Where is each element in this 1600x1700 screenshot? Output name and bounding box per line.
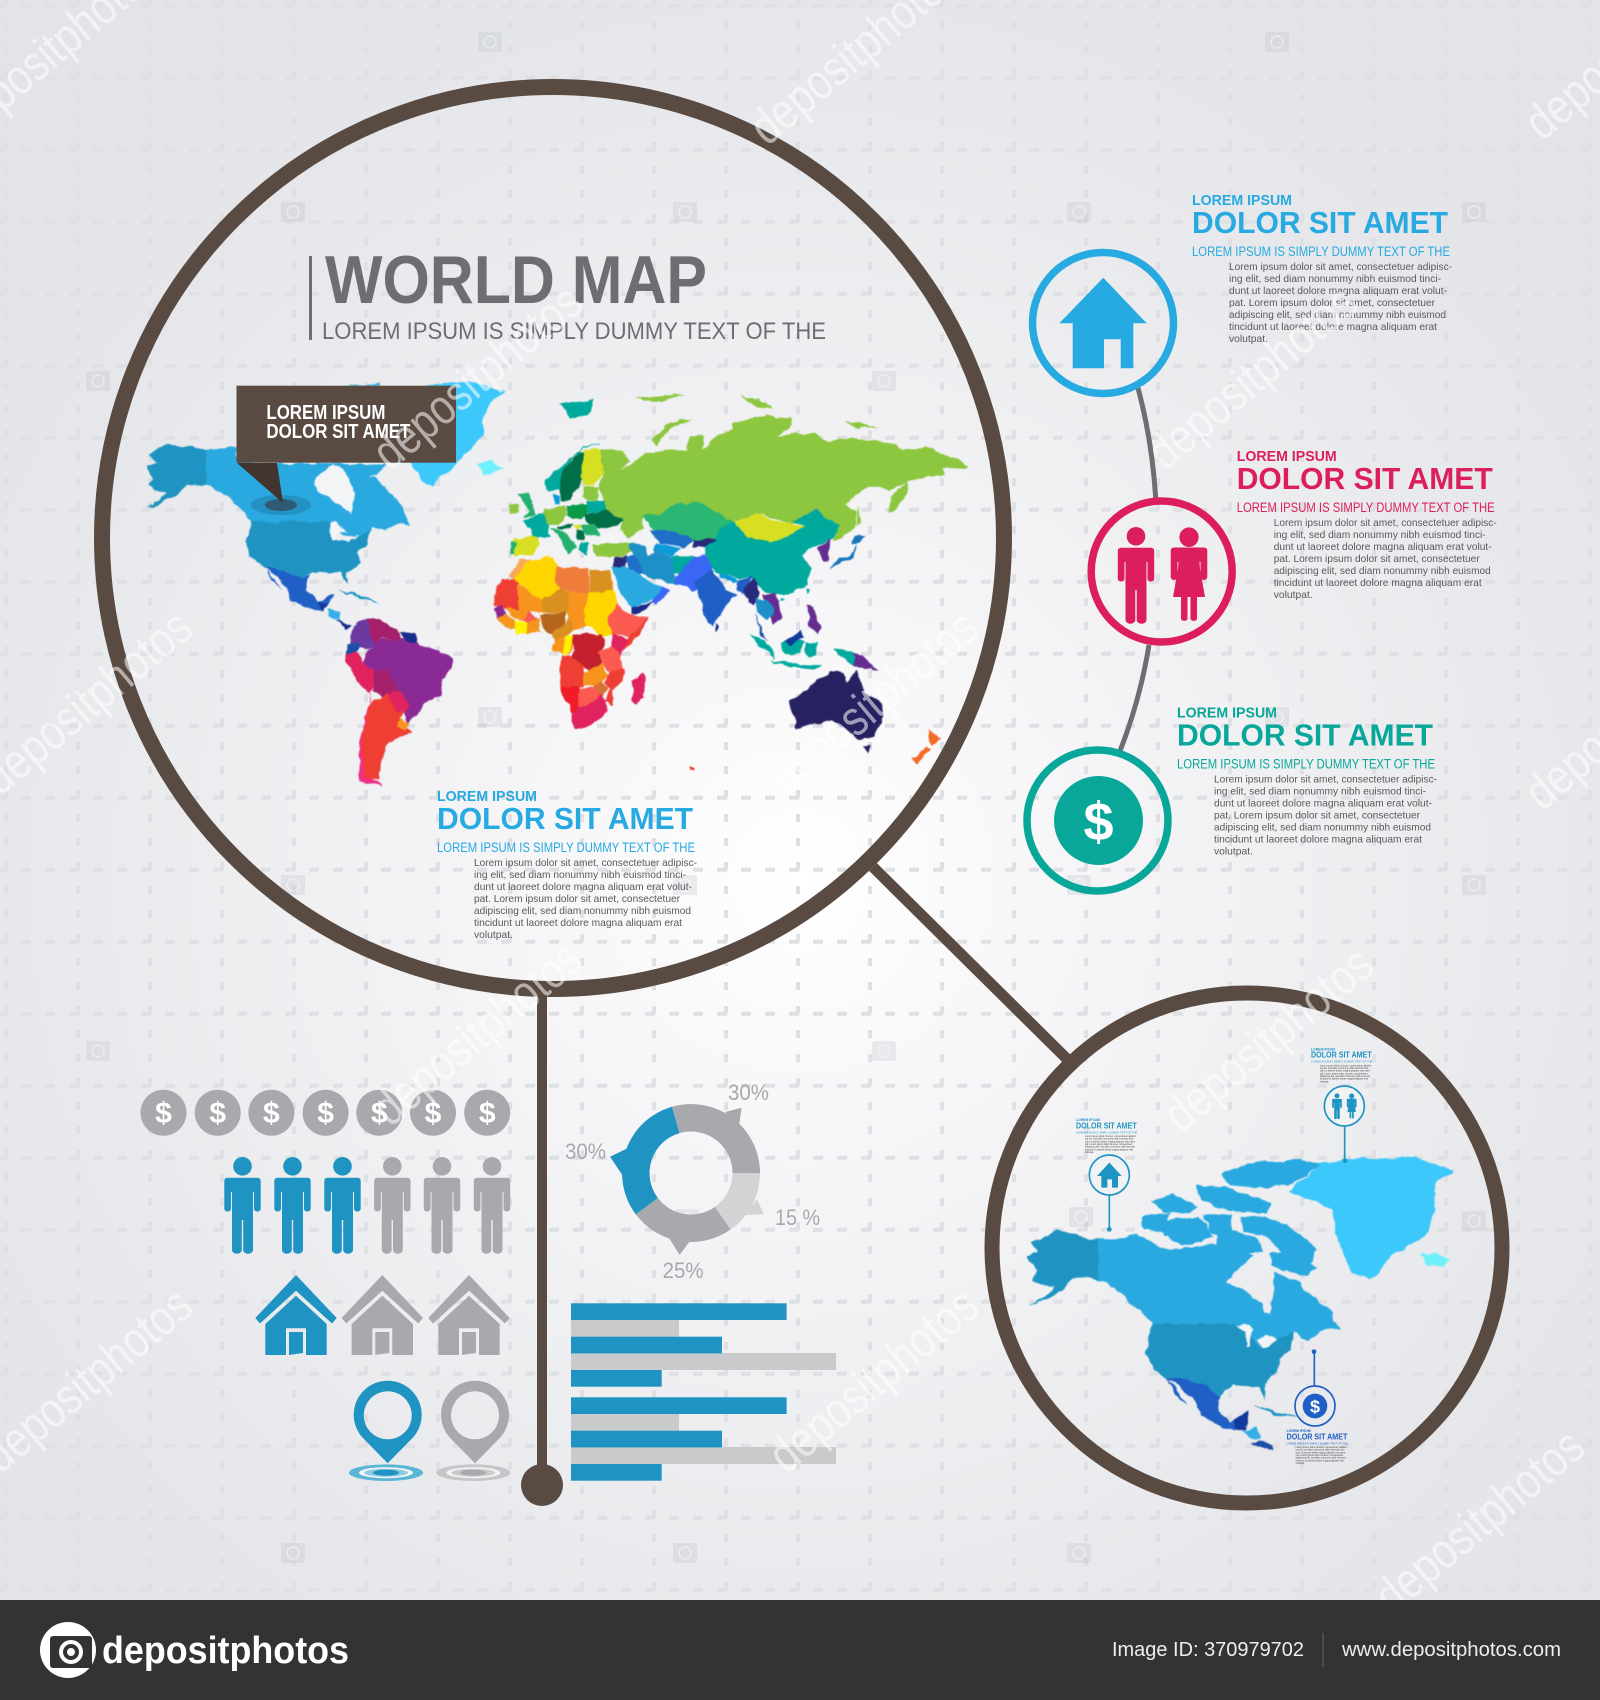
mini label: dollar: pat. Lorem ipsum dolor sit amet, consectetuer [1296,1454,1343,1457]
mini label: people: DOLOR SIT AMET [1311,1050,1372,1060]
pin: dollar [1295,1349,1335,1426]
watermark text: depositphotos [1136,274,1368,480]
panel: north america inset [992,993,1502,1503]
text block: pink: LOREM IPSUM [1237,448,1337,465]
mini label: people: tincidunt ut laoreet dolore magna aliquam erat [1320,1078,1368,1081]
text block: map caption [437,788,697,941]
inset map [1027,1157,1453,1450]
text block: teal: dunt ut laoreet dolore magna aliquam erat volut- [1214,798,1432,810]
mini label: dollar: ing elit, sed diam nonummy nibh euismod tinci- [1296,1449,1345,1452]
text block: blue: Lorem ipsum dolor sit amet, consectetuer adipisc- [1229,261,1452,273]
icon: dollar in teal circle [1027,750,1168,891]
mini label: people: LOREM IPSUM IS SIMPLY DUMMY TEXT OF THE [1311,1060,1372,1064]
text block: blue: dunt ut laoreet dolore magna aliquam erat volut- [1229,285,1447,297]
image id: Image ID: 370979702 [1112,1639,1304,1661]
inset circle ring [992,993,1502,1503]
big circle ring [102,87,1004,989]
text block: teal: DOLOR SIT AMET [1177,718,1433,752]
pictogram: houses [255,1275,510,1355]
mini label: house: DOLOR SIT AMET [1076,1120,1137,1130]
text block: map caption: DOLOR SIT AMET [437,801,693,836]
pin: people [1324,1086,1364,1163]
region: russia [558,396,968,540]
text block: teal [1177,704,1437,858]
mini label: dollar: dunt ut laoreet dolore magna aliquam erat volut- [1296,1451,1346,1454]
text block: pink: LOREM IPSUM IS SIMPLY DUMMY TEXT OF THE [1237,500,1495,515]
region: oceania [689,670,942,771]
mini label: house: LOREM IPSUM IS SIMPLY DUMMY TEXT OF THE [1076,1130,1137,1134]
donut labels [565,1080,820,1283]
mini label: house: pat. Lorem ipsum dolor sit amet, consectetuer [1085,1143,1133,1146]
callout: LOREM IPSUM [266,402,385,424]
subtitle: LOREM IPSUM IS SIMPLY DUMMY TEXT OF THE [322,318,826,345]
title: WORLD MAP [325,242,707,318]
text block: map caption: Lorem ipsum dolor sit amet, consectetuer adipisc- [474,857,697,869]
bar chart [571,1303,836,1481]
mini label: people: volutpat. [1320,1080,1329,1083]
pictogram: dollar coins: $ [263,1097,280,1130]
text block: pink: dunt ut laoreet dolore magna aliquam erat volut- [1274,541,1492,553]
mini label: dollar: tincidunt ut laoreet dolore magna aliquam erat [1296,1459,1344,1462]
mini label: people: dunt ut laoreet dolore magna aliquam erat volut- [1320,1070,1370,1073]
donut labels: 30% [565,1139,606,1164]
title tick [309,256,312,340]
watermark text: depositphotos [361,930,593,1136]
footer bar [0,1600,1600,1700]
text block: map caption: adipiscing elit, sed diam nonummy nibh euismod [474,905,691,917]
callout [236,386,456,515]
text block: pink: Lorem ipsum dolor sit amet, consectetuer adipisc- [1274,517,1497,529]
text block: blue: adipiscing elit, sed diam nonummy nibh euismod [1229,309,1446,321]
mini label: people: adipiscing elit, sed diam nonummy nibh euismod [1320,1075,1371,1078]
pictogram: dollar coins: $ [209,1097,226,1130]
pictogram: people [224,1157,510,1254]
inset pins and labels [1076,1047,1372,1465]
mini label: house: ing elit, sed diam nonummy nibh euismod tinci- [1085,1138,1134,1141]
pictogram: dollar coins [140,1090,510,1136]
mini label: house: dunt ut laoreet dolore magna aliquam erat volut- [1085,1140,1135,1143]
pin: house [1089,1155,1129,1232]
map: africa, europe, asia and oceania [494,396,968,771]
text block: blue [1192,192,1452,345]
donut labels: 25% [663,1258,704,1283]
text block: teal: volutpat. [1214,846,1253,858]
text block: blue: volutpat. [1229,333,1268,345]
pictogram: dollar coins: $ [155,1097,172,1130]
pin: dollar: $ [1310,1397,1320,1417]
logo wordmark: depositphotos [102,1630,349,1672]
mini label: dollar: adipiscing elit, sed diam nonummy nibh euismod [1296,1457,1346,1460]
connector line to small circle [873,867,1068,1060]
mini label: people [1311,1047,1372,1083]
text block: teal: tincidunt ut laoreet dolore magna aliquam erat [1214,834,1422,846]
pictogram: dollar coins: $ [371,1097,388,1130]
text block: blue: ing elit, sed diam nonummy nibh euismod tinci- [1229,273,1441,285]
region: asia [612,502,877,670]
text block: teal: ing elit, sed diam nonummy nibh euismod tinci- [1214,786,1426,798]
text block: blue: tincidunt ut laoreet dolore magna aliquam erat [1229,321,1437,333]
text block: blue: LOREM IPSUM IS SIMPLY DUMMY TEXT OF THE [1192,244,1450,259]
mini label: house: Lorem ipsum dolor sit amet, consectetuer adipisc- [1085,1135,1137,1138]
pictogram: dollar coins: $ [317,1097,334,1130]
mini label: house: LOREM IPSUM [1076,1118,1100,1122]
donut chart [565,1080,820,1283]
text block: teal: adipiscing elit, sed diam nonummy nibh euismod [1214,822,1431,834]
mini label: dollar: Lorem ipsum dolor sit amet, consectetuer adipisc- [1296,1446,1347,1449]
curved connectors between topic icons [1120,388,1156,751]
world map [146,382,968,787]
text block: teal: LOREM IPSUM IS SIMPLY DUMMY TEXT OF THE [1177,756,1435,772]
text block: blue: DOLOR SIT AMET [1192,205,1448,240]
watermark text: depositphotos [1152,936,1384,1142]
text block: teal: pat. Lorem ipsum dolor sit amet, consectetuer [1214,810,1420,822]
callout: DOLOR SIT AMET [266,421,410,443]
mini label: dollar: LOREM IPSUM [1287,1429,1311,1433]
vertical stem with ball [521,990,563,1506]
mini label: dollar: volutpat. [1296,1462,1305,1465]
region: europe [509,443,633,557]
text block: teal: Lorem ipsum dolor sit amet, consectetuer adipisc- [1214,774,1437,786]
mini label: house: volutpat. [1085,1151,1094,1154]
watermark text: depositphotos [757,599,989,805]
pictogram: dollar coins: $ [425,1097,442,1130]
watermark text: depositphotos [361,274,593,480]
text block: pink: tincidunt ut laoreet dolore magna aliquam erat [1274,577,1482,589]
text block: map caption: ing elit, sed diam nonummy nibh euismod tinci- [474,869,686,881]
text block: pink: DOLOR SIT AMET [1237,461,1493,496]
mini label: people: ing elit, sed diam nonummy nibh euismod tinci- [1320,1067,1369,1070]
text block: pink [1237,448,1497,601]
text block: map caption: tincidunt ut laoreet dolore magna aliquam erat [474,917,682,929]
text block: teal: LOREM IPSUM [1177,704,1277,722]
mini label: dollar: LOREM IPSUM IS SIMPLY DUMMY TEXT OF THE [1287,1441,1348,1445]
icon: house in blue circle [1032,252,1174,394]
icon: logo camera [40,1622,96,1678]
text block: blue: LOREM IPSUM [1192,192,1292,209]
text block: map caption: pat. Lorem ipsum dolor sit amet, consectetuer [474,893,680,905]
watermark text: depositphotos [757,1277,989,1483]
pictogram: dollar coins: $ [479,1097,496,1130]
map: americas [146,382,505,787]
text block: map caption: dunt ut laoreet dolore magna aliquam erat volut- [474,881,692,893]
region: africa [494,557,648,728]
mini label: house: tincidunt ut laoreet dolore magna aliquam erat [1085,1148,1133,1151]
mini label: house: adipiscing elit, sed diam nonummy nibh euismod [1085,1146,1136,1149]
mini label: people: LOREM IPSUM [1311,1047,1335,1051]
text block: pink: adipiscing elit, sed diam nonummy nibh euismod [1274,565,1491,577]
text block: map caption: volutpat. [474,929,513,941]
donut labels: 30% [728,1080,769,1105]
mini label: people: Lorem ipsum dolor sit amet, consectetuer adipisc- [1320,1064,1372,1067]
pictogram: location pins [349,1381,510,1481]
text block: map caption: LOREM IPSUM IS SIMPLY DUMMY TEXT OF THE [437,840,695,855]
text block: map caption: LOREM IPSUM [437,788,537,805]
mini label: dollar [1287,1429,1348,1465]
mini label: house [1076,1118,1137,1154]
icon: people in pink circle [1091,501,1232,642]
text block: pink: ing elit, sed diam nonummy nibh euismod tinci- [1274,529,1486,541]
mini label: dollar: DOLOR SIT AMET [1287,1431,1348,1441]
text block: pink: volutpat. [1274,589,1313,601]
icon: dollar in teal circle: $ [1083,792,1114,852]
text block: blue: pat. Lorem ipsum dolor sit amet, consectetuer [1229,297,1435,309]
donut labels: 15 % [775,1205,820,1230]
text block: pink: pat. Lorem ipsum dolor sit amet, consectetuer [1274,553,1480,565]
website: www.depositphotos.com [1341,1639,1561,1661]
mini label: people: pat. Lorem ipsum dolor sit amet, consectetuer [1320,1072,1368,1075]
